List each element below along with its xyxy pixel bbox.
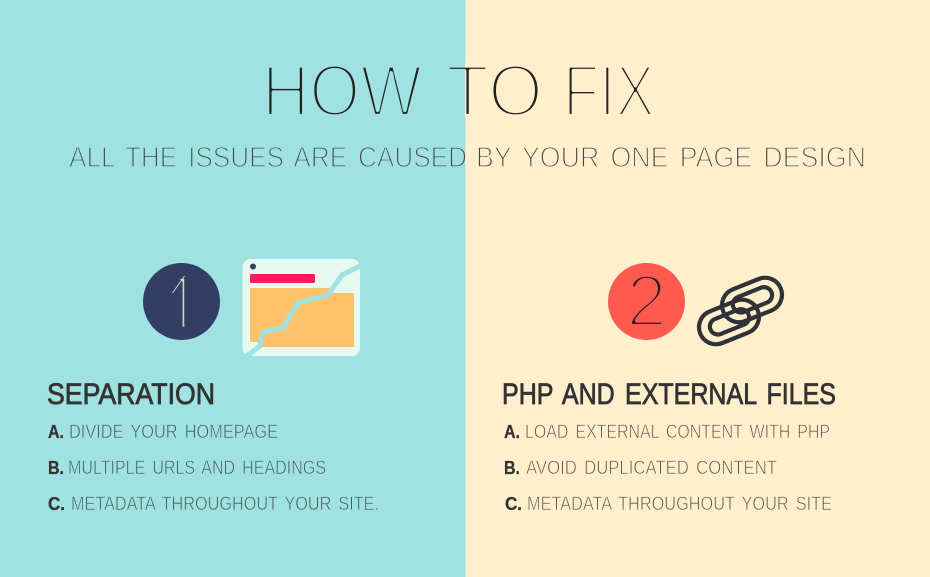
list item C: C. [505, 494, 522, 514]
list item C: METADATA THROUGHOUT YOUR SITE. [71, 494, 379, 515]
panel: right background [466, 0, 930, 577]
title [262, 51, 655, 132]
number badge 1 [143, 263, 220, 340]
list item B: MULTIPLE URLS AND HEADINGS [68, 458, 326, 479]
heading: php and external files: PHP AND EXTERNAL FILES [502, 378, 836, 411]
list item A: A. [504, 422, 520, 442]
panel: left background [0, 0, 466, 577]
list item A: DIVIDE YOUR HOMEPAGE [69, 422, 278, 443]
number badge 2 [608, 261, 685, 342]
list item A: LOAD EXTERNAL CONTENT WITH PHP [525, 422, 830, 443]
list item C: METADATA THROUGHOUT YOUR SITE [527, 494, 832, 515]
icon: chain link [694, 273, 787, 349]
panel: php and external files [502, 261, 836, 515]
number badge 2: 2 [626, 261, 667, 342]
number badge 1: 1 [160, 259, 204, 348]
list item A: A. [48, 422, 64, 442]
list item C: C. [48, 494, 65, 514]
title: HOW [262, 51, 422, 132]
subtitle: ALL THE ISSUES ARE CAUSED [69, 142, 467, 174]
heading: separation: SEPARATION [47, 378, 215, 411]
panel: separation [47, 259, 379, 515]
title: FIX [563, 51, 655, 132]
list item B: B. [504, 458, 520, 478]
subtitle: BY YOUR ONE PAGE DESIGN [476, 142, 866, 174]
icon: split web page window [242, 259, 362, 356]
list item B: B. [48, 458, 64, 478]
list item B: AVOID DUPLICATED CONTENT [526, 458, 777, 479]
title: TO [446, 51, 543, 132]
subtitle [69, 142, 866, 174]
